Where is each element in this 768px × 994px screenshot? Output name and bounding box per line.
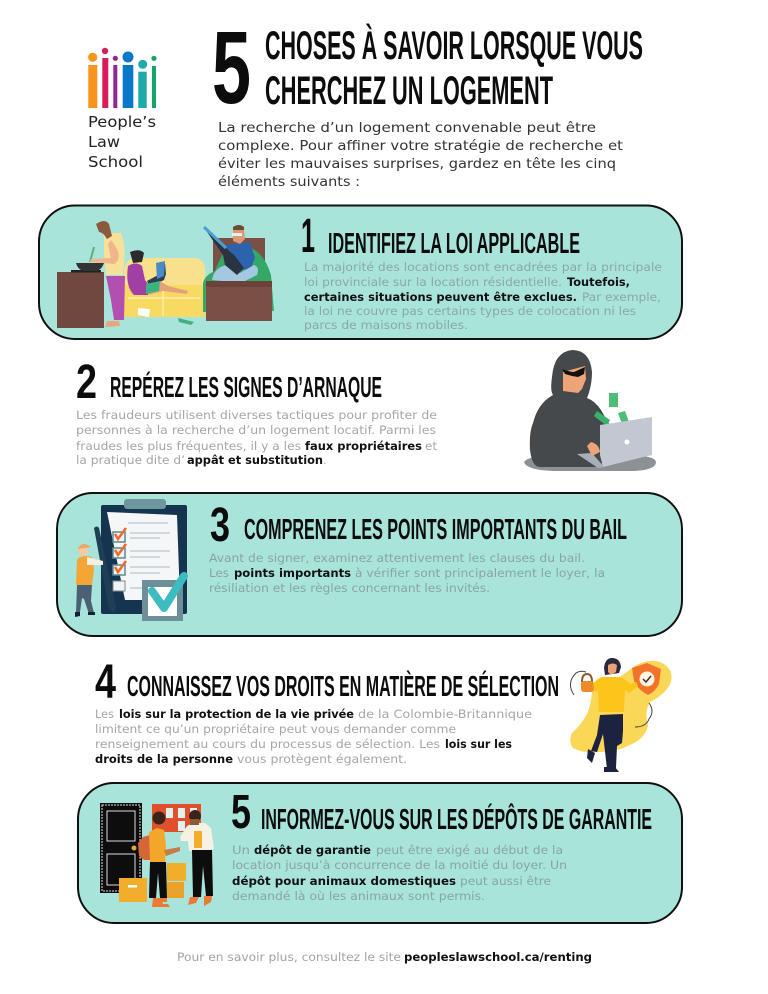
panel 1: identifiez la loi applicable [39,206,682,339]
logo: People's Law School [88,48,157,171]
body text: résiliation et les règles concernant les invités. [209,581,490,595]
number and heading [231,786,652,839]
number and heading: 1 [301,210,315,263]
number and heading: IDENTIFIEZ LA LOI APPLICABLE [328,228,580,260]
intro text: La recherche d’un logement convenable peut être [218,120,596,136]
body text: fraudes les plus fréquentes, il y a les [76,439,301,453]
footer: peopleslawschool.ca/renting [404,950,592,964]
body text [232,843,567,903]
intro text: éviter les mauvaises surprises, gardez en tête les cinq [218,156,616,172]
body text: la loi ne couvre pas certains types de colocation ni les [304,304,636,318]
illustration: liste de vérification du bail [75,499,187,621]
body text: . [323,453,327,467]
number and heading: 2 [76,356,97,409]
number and heading [95,656,559,709]
body text [95,707,532,766]
footer: Pour en savoir plus, consultez le site [177,950,401,964]
body text: parcs de maisons mobiles. [304,318,468,332]
number and heading [76,356,382,409]
illustration: personne avec bouclier et cadenas [570,658,672,772]
body text: vous protègent également. [237,752,407,766]
body text: Les [95,707,114,721]
illustration: remise des clés à la porte [100,803,214,907]
body text: points importants [234,566,351,580]
body text: lois sur la protection de la vie privée [119,707,354,721]
body text: faux propriétaires [305,439,422,453]
panel 3: comprenez les points importants du bail [57,493,682,636]
panel 5: informez-vous sur les dépôts de garantie [78,783,682,923]
body text: Les [209,566,229,580]
body text: à vérifier sont principalement le loyer, la [355,566,605,580]
number and heading [301,210,580,263]
body text: appât et substitution [187,453,323,467]
section 4: connaissez vos droits en matière de sélection [95,656,672,772]
footer [177,950,592,964]
illustration: colocataires dans un logement [57,221,274,328]
number and heading [210,499,627,552]
body text: loi provinciale sur la location résidentielle. [304,275,562,289]
body text: et [425,439,437,453]
body text: dépôt pour animaux domestiques [232,874,456,888]
body text: certaines situations peuvent être exclues. [304,290,577,304]
body text: de la Colombie-Britannique [358,707,532,721]
body text: Par exemple, [582,290,661,304]
logo: People's Law School: People’s [88,113,156,131]
body text [304,260,662,332]
logo: People's Law School: Law [88,133,120,151]
number and heading: 3 [210,499,230,552]
logo: People's Law School: School [88,153,143,171]
body text: peut être exigé au début de la [376,843,563,857]
body text: renseignement au cours du processus de sélection. Les [95,737,440,751]
title: 5 [212,10,251,125]
intro text: complexe. Pour affiner votre stratégie de recherche et [218,138,623,154]
body text: la pratique dite d’ [76,453,185,467]
body text: Un [232,843,250,857]
body text: dépôt de garantie [254,843,371,857]
body text: peut aussi être [460,874,551,888]
number and heading: 5 [231,786,251,839]
body text [209,551,605,595]
body text: Avant de signer, examinez attentivement les clauses du bail. [209,551,585,565]
intro text [218,120,623,190]
body text: lois sur les [445,737,512,751]
illustration: fraudeur à capuche avec ordinateur [524,350,656,471]
body text: Toutefois, [567,275,630,289]
number and heading: 4 [95,656,116,709]
intro text: éléments suivants : [218,174,360,190]
body text: location jusqu’à concurrence de la moitié du loyer. Un [232,858,567,872]
section 2: repérez les signes d'arnaque [76,350,656,471]
body text: personnes à la recherche d’un logement locatif. Parmi les [76,423,436,437]
number and heading: REPÉREZ LES SIGNES D’ARNAQUE [110,372,382,404]
body text: Les fraudeurs utilisent diverses tactiques pour profiter de [76,408,437,422]
body text: limitent ce qu’un propriétaire peut vous demander comme [95,722,456,736]
body text: demandé là où les animaux sont permis. [232,889,485,903]
title [212,10,643,125]
body text: La majorité des locations sont encadrées par la principale [304,260,662,274]
body text [76,408,437,467]
body text: droits de la personne [95,752,233,766]
